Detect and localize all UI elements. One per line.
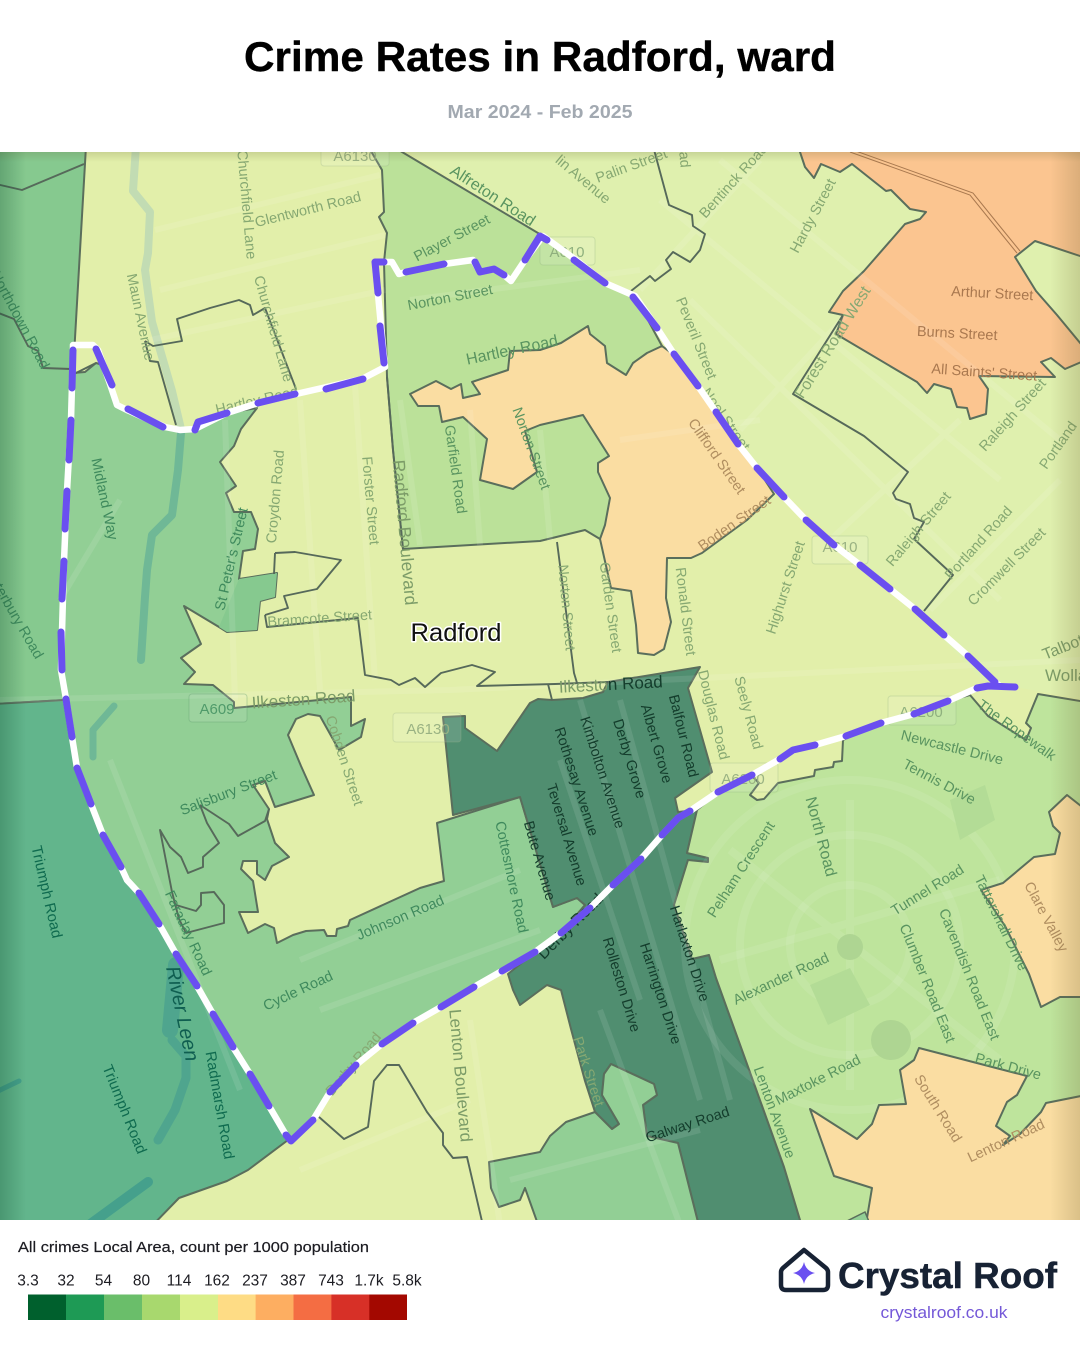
- labels on pale yellow-green: Hardy Street: [787, 176, 840, 256]
- labels on pale yellow-green: Palin Street: [594, 146, 670, 187]
- road plate A6200 lower: A6200: [721, 771, 765, 788]
- labels on pale yellow-green: Raleigh Street: [883, 489, 955, 570]
- labels on darker mid green: Cycle Road: [261, 968, 336, 1014]
- labels on orange: All Saints' Street: [931, 361, 1038, 385]
- legend colour ramp: [28, 1294, 407, 1320]
- small mid-green corner at map bottom: [848, 1211, 870, 1220]
- labels on pale yellow-green: Portland Road: [942, 504, 1016, 583]
- labels on mid green: Norton Street: [406, 282, 494, 314]
- labels on pale yellow-green: Park Street: [569, 1035, 607, 1109]
- labels on pale yellow-green: Maun Avenue: [123, 272, 157, 362]
- labels on orange: [917, 284, 1038, 385]
- area: South Road orange: [810, 1048, 1080, 1230]
- labels on pale yellow-green: Forest Road West: [792, 283, 875, 402]
- labels on dark green: Bute Avenue: [520, 819, 558, 903]
- railway line: [850, 150, 1020, 253]
- legend scale values: 80: [133, 1272, 150, 1290]
- A-road number plates: [189, 146, 956, 792]
- labels on Triumph green: Triumph Road: [27, 844, 65, 940]
- road plate A6200 lower: [710, 763, 778, 792]
- labels on mid green: Clumber Road East: [896, 922, 958, 1045]
- legend: [17, 1239, 422, 1320]
- labels on pale yellow-green: ad: [675, 151, 693, 168]
- labels on pale orange: [684, 416, 1071, 1166]
- legend scale values: 32: [57, 1272, 75, 1290]
- labels on pale yellow-green: Hartley Road: [214, 384, 300, 418]
- road plate A6130 north: A6130: [333, 148, 377, 165]
- larger labels on pale yellow-green: [251, 459, 1080, 1143]
- logo: Crystal Roof: [781, 1250, 1058, 1322]
- labels on dark green: Rolleston Drive: [599, 935, 643, 1034]
- labels on dark green: Harlaxton Drive: [666, 904, 712, 1004]
- labels on pale yellow-green: Douglas Road: [694, 669, 732, 762]
- labels on darker mid green: Johnson Road: [354, 893, 447, 944]
- legend scale values: 237: [242, 1272, 268, 1290]
- north-east light green area: [400, 146, 1080, 700]
- labels on pale yellow-green: Cromwell Street: [965, 525, 1049, 609]
- labels on pale yellow-green: Derby Road: [323, 1030, 385, 1099]
- labels on pale yellow-green: Noel Street: [698, 385, 753, 454]
- larger labels on pale yellow-green: Ilkeston Road: [558, 672, 663, 697]
- labels on mid green: The Ropewalk: [974, 697, 1059, 765]
- labels on dark green: Rothesay Avenue: [551, 725, 601, 838]
- park roundabouts: [810, 785, 995, 1060]
- title: Crime Rates in Radford, ward: [244, 33, 836, 80]
- road texture: [0, 272, 986, 1220]
- labels on dark green: Albert Grove: [637, 703, 675, 785]
- labels on pale orange: Boden Street: [695, 493, 774, 555]
- labels on mid green: Player Street: [411, 212, 493, 265]
- labels on mid green: Alfreton Road: [447, 162, 538, 230]
- area: Alfreton and Norton green: [368, 146, 662, 549]
- labels on mid green: North Road: [802, 795, 839, 879]
- labels on dark green: Galway Road: [644, 1104, 732, 1146]
- legend scale values: 54: [95, 1272, 112, 1290]
- labels on darker mid green: Midland Way: [87, 457, 121, 542]
- area: top-left green: [0, 146, 86, 704]
- larger labels on pale yellow-green: Radford Boulevard: [389, 459, 421, 606]
- road plate A6130 centre: A6130: [406, 721, 450, 738]
- labels on pale orange: South Road: [910, 1072, 964, 1146]
- website: crystalroof.co.uk: [880, 1303, 1008, 1322]
- labels on pale yellow-green: Cobden Street: [322, 714, 366, 808]
- legend scale values: 1.7k: [354, 1272, 384, 1290]
- labels on dark green: Derby Road: [535, 891, 607, 963]
- labels on pale yellow-green: Portland: [1037, 419, 1080, 472]
- labels on pale yellow-green: Norton Street: [554, 564, 578, 651]
- legend scale values: 387: [280, 1272, 306, 1290]
- labels on pale yellow-green: Glentworth Road: [253, 189, 363, 231]
- labels on mid green: Hartley Road: [465, 333, 559, 369]
- map base: light yellow-green area: [0, 152, 1080, 1220]
- labels on pale orange: Clare Valley: [1020, 879, 1071, 956]
- labels on dark green: [520, 693, 732, 1146]
- labels on pale yellow-green: Forster Street: [358, 456, 382, 546]
- labels on mid green: Tunnel Road: [889, 862, 967, 919]
- area: southern mid-green: [489, 1064, 700, 1230]
- road plate A610 north: A610: [549, 244, 585, 261]
- labels on dark green: Harrington Drive: [636, 941, 684, 1046]
- labels on pale yellow-green: Churchfield Lane: [250, 274, 296, 384]
- labels on pale yellow-green: Seely Road: [730, 675, 765, 751]
- larger labels on pale yellow-green: Ilkeston Road: [251, 686, 356, 713]
- labels on mid green: Pelham Crescent: [705, 819, 779, 921]
- labels on Triumph green: Triumph Road: [99, 1062, 150, 1156]
- labels on pale yellow-green: Ronald Street: [672, 567, 698, 656]
- legend scale values: 114: [167, 1272, 192, 1290]
- road plate A609: A609: [199, 701, 235, 718]
- water: canal and River Leen: [0, 146, 186, 1228]
- area: Balfour and Harrington dark green: [443, 667, 803, 1230]
- labels on mid green: Cavendish Road East: [935, 906, 1002, 1043]
- labels on darker mid green: [0, 268, 531, 1014]
- wordmark: Crystal Roof: [838, 1255, 1058, 1296]
- ward boundary: white casing and purple dashes: [61, 236, 1015, 1141]
- legend scale values: [17, 1272, 422, 1290]
- labels on dark green: Derby Grove: [609, 717, 648, 800]
- labels on mid green: Newcastle Drive: [899, 728, 1005, 769]
- labels on darker mid green: Cottesmore Road: [491, 820, 531, 934]
- area: St Peter's notch green: [219, 573, 277, 632]
- area: Clare Valley orange: [981, 795, 1080, 1007]
- road plate A6200: [888, 696, 956, 725]
- road plate A609: [189, 694, 247, 722]
- labels on Triumph green: Radmarsh Road: [202, 1050, 237, 1160]
- labels on orange: Arthur Street: [951, 284, 1034, 304]
- labels on pale yellow-green: Raleigh Street: [976, 376, 1050, 455]
- road plate A610 east: A610: [822, 539, 858, 556]
- labels on pale yellow-green: Churchfield Lane: [233, 149, 259, 260]
- labels on darker mid green: Salisbury Street: [178, 767, 279, 819]
- labels on pale yellow-green: Croydon Road: [264, 449, 288, 544]
- south-east orange patches: [810, 795, 1080, 1230]
- labels on pale yellow-green: Bentinck Road: [697, 141, 772, 222]
- boundary lines between neighbourhoods: [0, 146, 953, 1230]
- labels on pale yellow-green: [123, 141, 1080, 1109]
- icon: house with star: [781, 1250, 828, 1290]
- area: central orange band: [410, 326, 774, 655]
- park rings and paths: [681, 799, 1001, 1085]
- labels on pale yellow-green: Highurst Street: [764, 539, 809, 636]
- road plate A6200: A6200: [899, 704, 943, 721]
- road plate A610 north: [540, 237, 595, 265]
- area: Triumph Road darker green: [0, 700, 288, 1230]
- legend scale values: 5.8k: [392, 1272, 422, 1290]
- street labels: [0, 141, 1080, 1166]
- label: River Leen: River Leen: [161, 964, 203, 1063]
- labels on darker mid green: Faraday Road: [161, 888, 214, 978]
- labels on dark green: Balfour Road: [665, 693, 701, 779]
- legend scale values: 743: [318, 1272, 344, 1290]
- labels on mid green: Maxtoke Road: [773, 1052, 863, 1109]
- road plate A610 east: [812, 536, 868, 564]
- labels on mid green: Garfield Road: [441, 424, 469, 515]
- area: north-east orange: [798, 146, 1080, 419]
- larger labels on pale yellow-green: Lenton Boulevard: [445, 1008, 476, 1143]
- labels on dark green: Kimbolton Avenue: [576, 715, 627, 831]
- label: Radford ward name: Radford: [410, 619, 502, 647]
- labels on darker mid green: St Peter's Street: [212, 506, 252, 612]
- labels on mid green: Tattershall Drive: [971, 873, 1031, 973]
- road plate A6130 north: [320, 152, 390, 166]
- labels on pale orange: Clifford Street: [684, 416, 748, 497]
- subtitle: date range: Mar 2024 - Feb 2025: [448, 102, 632, 122]
- legend scale values: 3.3: [17, 1272, 39, 1290]
- map edge shading: [0, 152, 1080, 1220]
- labels on pale yellow-green: Bramcote Street: [267, 607, 373, 631]
- labels on orange: Burns Street: [917, 324, 998, 344]
- area: the Park green: [674, 694, 1080, 1230]
- area: Midland Way green: [61, 363, 585, 1141]
- legend scale values: 162: [204, 1272, 230, 1290]
- labels on pale yellow-green: Peveril Street: [672, 295, 719, 382]
- labels on pale yellow-green: lin Avenue: [552, 152, 613, 207]
- labels on Triumph green: [27, 844, 237, 1160]
- labels on pale yellow-green: Garden Street: [596, 561, 624, 654]
- labels on mid green: Norton Street: [508, 405, 553, 492]
- labels on mid green: Lenton Avenue: [750, 1065, 798, 1161]
- labels on dark green: Teversal Avenue: [543, 782, 589, 888]
- labels on mid green: Tennis Drive: [900, 757, 978, 808]
- road plate A6130 centre: [393, 713, 461, 742]
- labels on mid green: Park Drive: [973, 1051, 1043, 1084]
- labels on mid green: [406, 162, 1059, 1161]
- legend title: All crimes Local Area, count per 1000 population: [18, 1239, 369, 1256]
- labels on pale orange: Lenton Road: [965, 1117, 1047, 1166]
- labels on mid green: Alexander Road: [731, 950, 832, 1009]
